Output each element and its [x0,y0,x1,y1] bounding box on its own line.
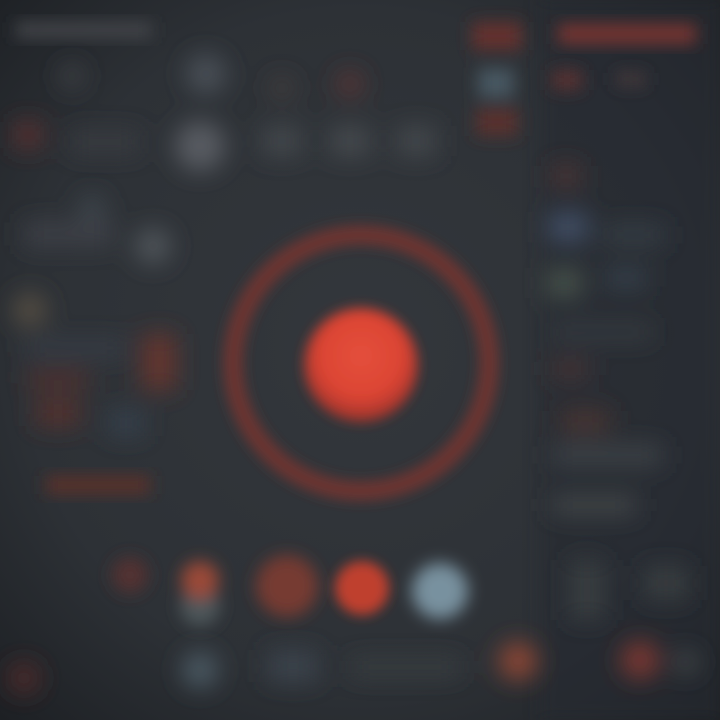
icon row: bottom circles [112,555,468,626]
icon: bright red circle [335,561,389,615]
icon: small dark red circle [112,557,148,593]
heading: top right title [558,24,696,44]
panel: top row icons [14,54,436,171]
chart: target core [304,308,418,422]
icon: dull red circle [256,555,318,617]
panel: bottom row [8,641,698,694]
panel: left middle block [13,194,176,436]
callout: left red label [46,476,150,494]
heading: top left title [16,22,152,38]
chart: target ring [233,235,489,491]
icon: pale blue circle [412,563,468,619]
icon: red over grey circle [180,561,220,626]
panel: right column items [546,165,688,620]
panel: right column [540,0,720,720]
panel: top right tags [472,22,646,136]
